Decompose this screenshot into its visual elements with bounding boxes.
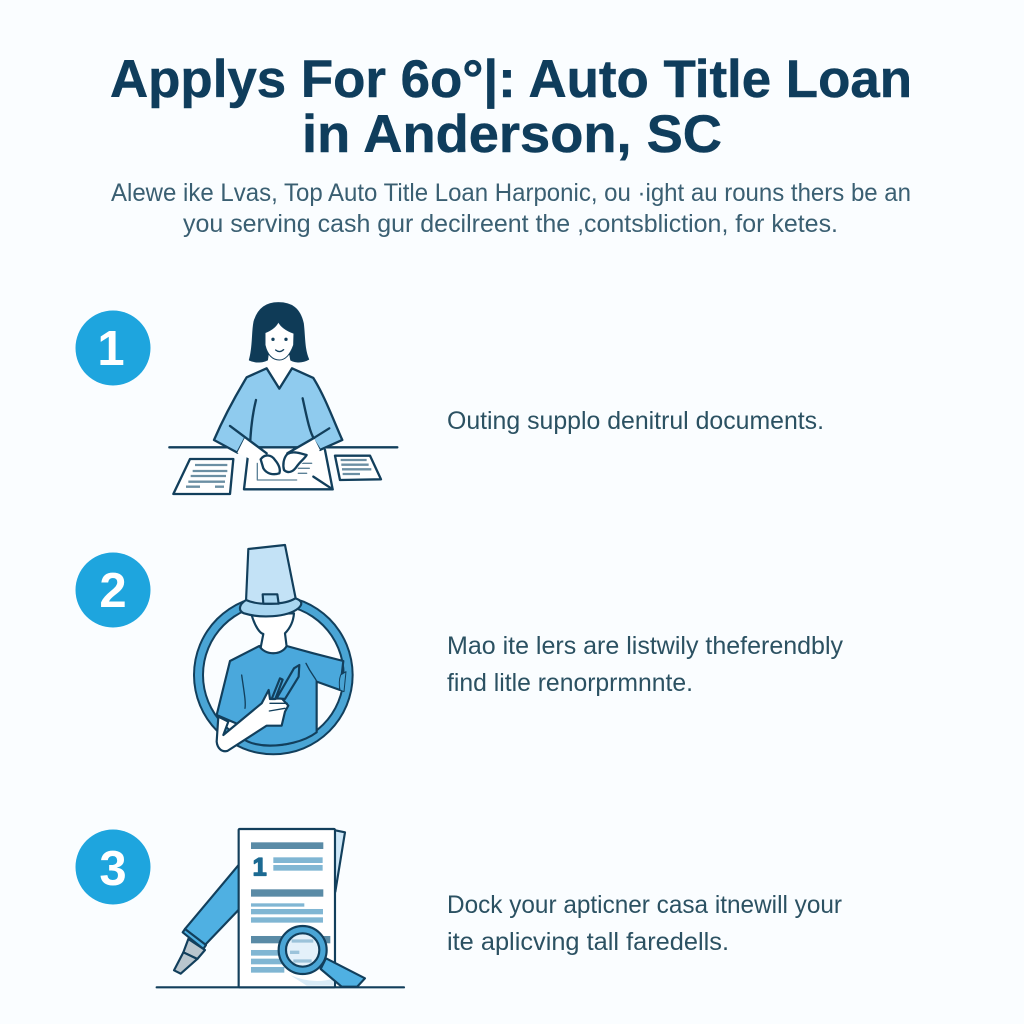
step 2 illustration: figure in hat inside ring holding pens bbox=[193, 545, 354, 755]
magnifier bbox=[279, 926, 365, 987]
step 2 text: find litle renorprmnnte. bbox=[447, 669, 693, 697]
title: Applys For 6o°|: Auto Title Loan bbox=[110, 50, 912, 110]
right document bbox=[335, 456, 381, 480]
face details bbox=[271, 338, 288, 341]
step 3 text bbox=[447, 891, 842, 956]
subtitle bbox=[111, 179, 911, 238]
hands bbox=[261, 455, 280, 474]
document rows bbox=[251, 842, 334, 986]
step 1 text: Outing supplo denitrul documents. bbox=[447, 407, 824, 435]
sweater bbox=[214, 368, 342, 453]
hat brim bbox=[240, 598, 301, 616]
hat crown bbox=[246, 545, 296, 612]
desk line bbox=[169, 444, 397, 451]
centre document bbox=[244, 449, 333, 489]
step 1 badge: 1 bbox=[97, 322, 125, 376]
title: in Anderson, SC bbox=[302, 105, 722, 164]
step 2 badge bbox=[76, 552, 150, 628]
arm and hand bbox=[217, 690, 288, 751]
document bbox=[239, 829, 335, 987]
shirt bbox=[217, 646, 343, 746]
pens bbox=[277, 665, 299, 699]
step 2 text bbox=[447, 632, 843, 697]
step 3 badge bbox=[76, 830, 150, 904]
forearms bbox=[237, 437, 269, 465]
step 2 badge: 2 bbox=[99, 564, 127, 618]
left document bbox=[173, 459, 233, 494]
step 3 text: Dock your apticner casa itnewill your bbox=[447, 891, 842, 919]
step 1 illustration: person at desk with documents bbox=[169, 303, 397, 494]
step 3 illustration: pen, document and magnifier bbox=[157, 829, 404, 987]
hat band bbox=[263, 594, 279, 604]
document number: 1 bbox=[253, 854, 267, 882]
step 1 badge bbox=[76, 310, 150, 386]
step 3 badge: 3 bbox=[99, 842, 127, 896]
back page bbox=[333, 830, 345, 892]
ring bbox=[193, 595, 354, 755]
subtitle: Alewe ike Lvas, Top Auto Title Loan Harponic, ou ·ight au rouns thers be an bbox=[111, 179, 911, 207]
right sleeve ring overlap bbox=[339, 672, 346, 692]
title bbox=[110, 50, 912, 164]
step 3 text: ite aplicving tall faredells. bbox=[447, 928, 729, 956]
head and neck bbox=[252, 613, 294, 654]
pen bbox=[174, 863, 240, 974]
subtitle: you serving cash gur decilreent the ,contsbliction, for ketes. bbox=[183, 210, 838, 238]
hair bbox=[249, 303, 309, 362]
ground line bbox=[157, 984, 404, 991]
step 2 text: Mao ite lers are listwily theferendbly bbox=[447, 632, 843, 660]
neck and face bbox=[267, 355, 292, 389]
